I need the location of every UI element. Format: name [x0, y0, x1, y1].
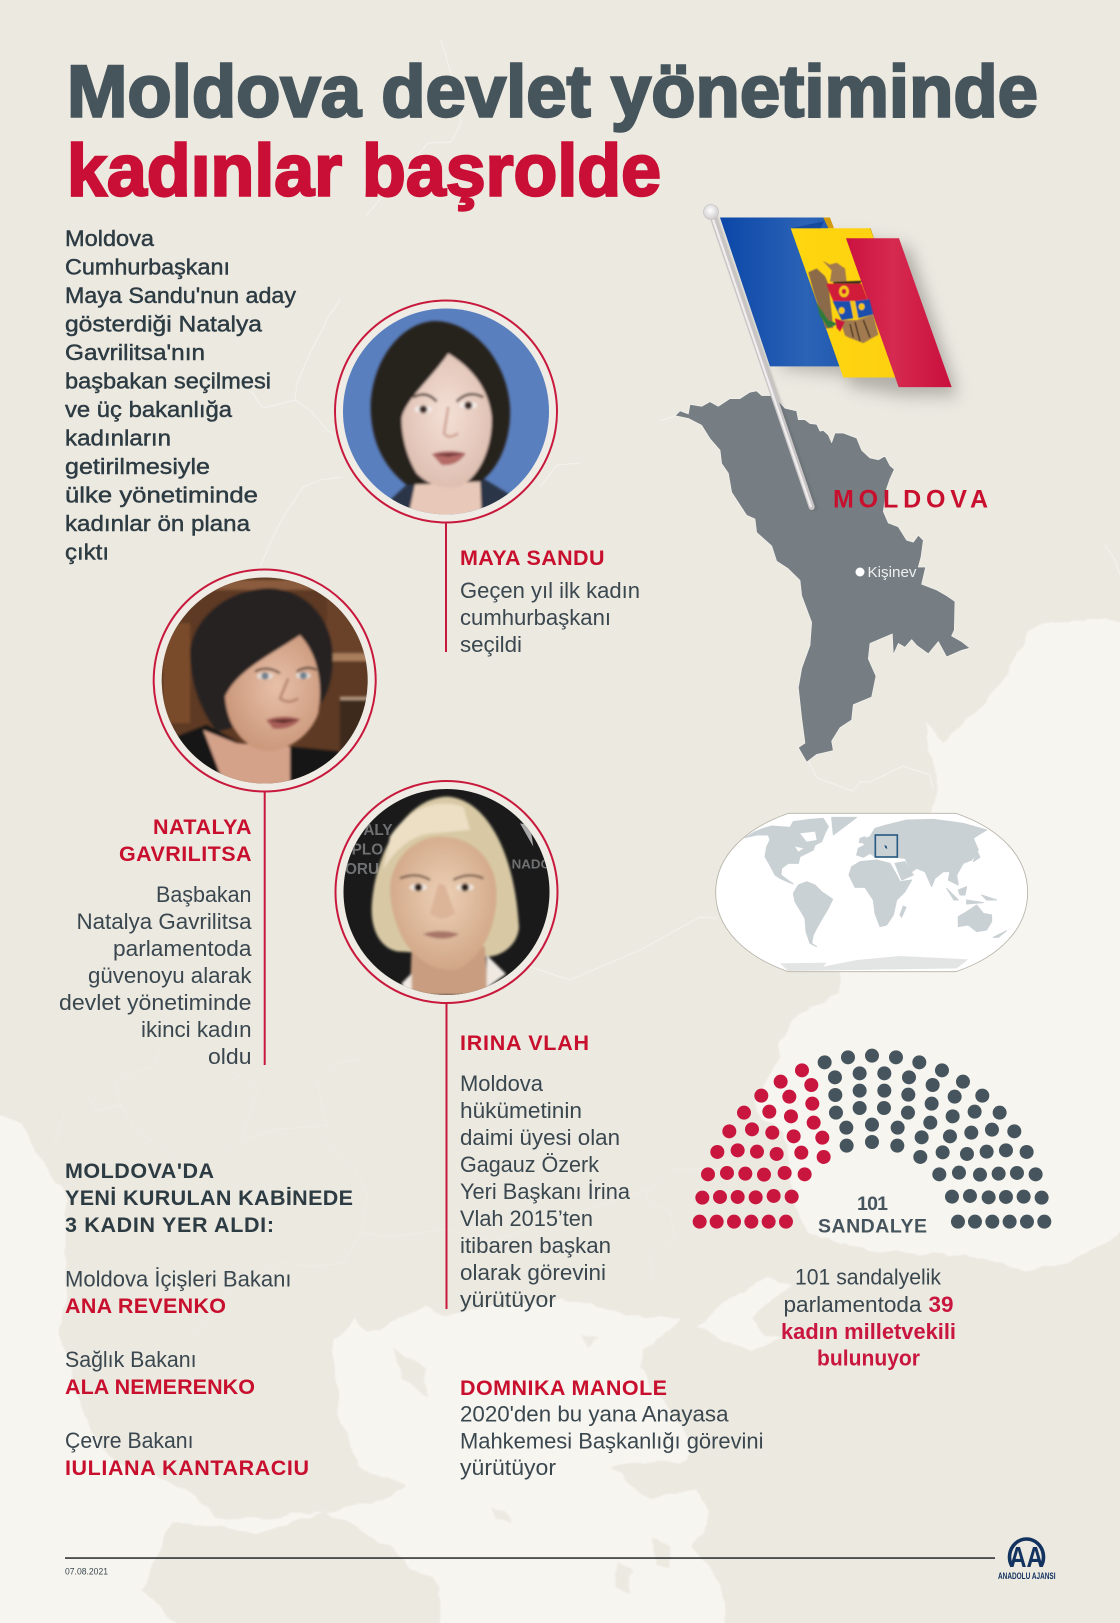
- person text: Natalya Gavrilitsa: [59, 815, 252, 1069]
- cabinet heading: YENİ KURULAN KABİNEDE: [65, 1186, 353, 1210]
- intro paragraph: başbakan seçilmesi: [65, 368, 271, 394]
- person text: Domnika Manole: [460, 1376, 764, 1480]
- person text: Natalya Gavrilitsa: Başbakan: [156, 882, 252, 907]
- cabinet heading: 3 KADIN YER ALDI:: [65, 1213, 274, 1237]
- minister: Ana Revenko: Moldova İçişleri Bakanı: [65, 1266, 292, 1292]
- person text: Natalya Gavrilitsa: GAVRILITSA: [119, 842, 252, 866]
- logo: Anadolu Ajansi: [998, 1539, 1056, 1582]
- intro paragraph: ve üç bakanlığa: [65, 397, 232, 422]
- cabinet heading: [65, 1159, 353, 1237]
- minister: Iuliana Kantaraciu: Çevre Bakanı: [65, 1428, 194, 1453]
- intro paragraph: çıktı: [65, 540, 109, 564]
- intro paragraph: getirilmesiyle: [65, 454, 210, 479]
- parliament caption: 101 sandalyelik: [795, 1264, 942, 1290]
- minister: Ala Nemerenko: ALA NEMERENKO: [65, 1375, 255, 1399]
- person text: Domnika Manole: 2020'den bu yana Anayasa: [460, 1402, 729, 1426]
- parliament caption: kadın milletvekili: [781, 1319, 956, 1344]
- footer: [65, 1539, 1056, 1582]
- person text: Natalya Gavrilitsa: devlet yönetiminde: [59, 990, 252, 1015]
- backdrop lettering: ALY: [363, 822, 393, 839]
- person text: Irina Vlah: Yeri Başkanı İrina: [460, 1179, 630, 1204]
- connector: Natalya Gavrilitsa: [264, 792, 266, 1065]
- map: Moldova: [675, 391, 988, 762]
- seats: other (62): [818, 1049, 1051, 1229]
- intro paragraph: Cumhurbaşkanı: [65, 254, 230, 280]
- portrait: Maya Sandu: [335, 300, 557, 523]
- map label: MOLDOVA: [833, 486, 988, 514]
- parliament caption: parlamentoda: [784, 1292, 922, 1317]
- person text: Irina Vlah: olarak görevini: [460, 1260, 606, 1285]
- person text: Natalya Gavrilitsa: Natalya Gavrilitsa: [76, 909, 252, 934]
- person text: Maya Sandu: Geçen yıl ilk kadın: [460, 578, 640, 603]
- connector: Irina Vlah: [446, 1004, 448, 1309]
- seat total: [818, 1193, 927, 1238]
- seat total: SANDALYE: [818, 1216, 927, 1238]
- title: [67, 52, 1038, 212]
- backdrop lettering: PLO: [352, 841, 383, 858]
- seat total: 101: [857, 1193, 888, 1215]
- person text: Natalya Gavrilitsa: oldu: [208, 1044, 252, 1069]
- person text: Domnika Manole: Mahkemesi Başkanlığı görevini: [460, 1428, 764, 1454]
- portrait: Natalya Gavrilitsa: [154, 570, 376, 792]
- coat of arms: [808, 261, 878, 343]
- portrait: Irina Vlah: [59, 204, 1056, 1582]
- parliament seat chart: [693, 1049, 1051, 1238]
- person text: Irina Vlah: yürütüyor: [460, 1287, 557, 1312]
- backdrop lettering: [346, 824, 547, 874]
- person text: Maya Sandu: [460, 546, 640, 657]
- person text: Domnika Manole: yürütüyor: [460, 1455, 557, 1480]
- backdrop lettering: ORU: [345, 861, 379, 878]
- intro paragraph: ülke yönetiminde: [65, 482, 258, 508]
- person text: Maya Sandu: MAYA SANDU: [460, 546, 604, 570]
- person text: Irina Vlah: [460, 1031, 630, 1312]
- flag pole: [704, 204, 815, 510]
- date: 07.08.2021: [65, 1566, 108, 1576]
- world locator map: [716, 813, 1028, 972]
- minister: Ala Nemerenko: [65, 1347, 255, 1399]
- intro paragraph: gösterdiği Natalya: [65, 312, 263, 336]
- capital: Kişinev: Kişinev: [868, 565, 917, 581]
- minister: Ala Nemerenko: Sağlık Bakanı: [65, 1347, 196, 1372]
- intro paragraph: kadınlar ön plana: [65, 511, 251, 536]
- person text: Natalya Gavrilitsa: ikinci kadın: [141, 1017, 252, 1042]
- seats: women (39): [693, 1063, 831, 1229]
- intro paragraph: Moldova: [65, 226, 155, 251]
- person text: Domnika Manole: DOMNIKA MANOLE: [460, 1376, 667, 1400]
- person text: Natalya Gavrilitsa: güvenoyu alarak: [88, 963, 252, 988]
- person text: Maya Sandu: cumhurbaşkanı: [460, 605, 611, 630]
- person text: Irina Vlah: Gagauz Özerk: [460, 1152, 600, 1177]
- backdrop lettering: NADO: [512, 856, 551, 871]
- minister: Ana Revenko: ANA REVENKO: [65, 1294, 226, 1318]
- title line 1: Moldova devlet yönetiminde: [67, 52, 1038, 132]
- title line 2: kadınlar başrolde: [67, 130, 661, 212]
- connector: Maya Sandu: [445, 523, 447, 652]
- cabinet panel: [65, 1159, 353, 1480]
- person text: Irina Vlah: itibaren başkan: [460, 1233, 611, 1258]
- cabinet heading: MOLDOVA'DA: [65, 1159, 214, 1183]
- person text: Irina Vlah: hükümetinin: [460, 1098, 582, 1123]
- minister: Iuliana Kantaraciu: [65, 1428, 309, 1480]
- minister: Ana Revenko: [65, 1266, 292, 1318]
- person text: Irina Vlah: IRINA VLAH: [460, 1031, 589, 1055]
- intro paragraph: Maya Sandu'nun aday: [65, 283, 297, 308]
- person text: Irina Vlah: Moldova: [460, 1071, 543, 1096]
- minister: Iuliana Kantaraciu: IULIANA KANTARACIU: [65, 1456, 309, 1480]
- logo: Anadolu Ajansi: AA: [1010, 1542, 1044, 1574]
- logo: Anadolu Ajansi: ANADOLU AJANSI: [998, 1571, 1056, 1582]
- person text: Irina Vlah: Vlah 2015’ten: [460, 1206, 593, 1231]
- person text: Natalya Gavrilitsa: parlamentoda: [113, 936, 252, 961]
- person text: Natalya Gavrilitsa: NATALYA: [153, 815, 252, 839]
- intro paragraph: kadınların: [65, 426, 171, 450]
- person text: Irina Vlah: daimi üyesi olan: [460, 1125, 620, 1150]
- parliament caption: [781, 1264, 956, 1370]
- person text: Maya Sandu: seçildi: [460, 632, 522, 657]
- intro paragraph: Gavrilitsa'nın: [65, 340, 205, 365]
- parliament caption: 39: [928, 1292, 954, 1317]
- parliament caption: bulunuyor: [817, 1346, 920, 1370]
- flag of Moldova: [720, 218, 958, 396]
- intro paragraph: [65, 226, 297, 564]
